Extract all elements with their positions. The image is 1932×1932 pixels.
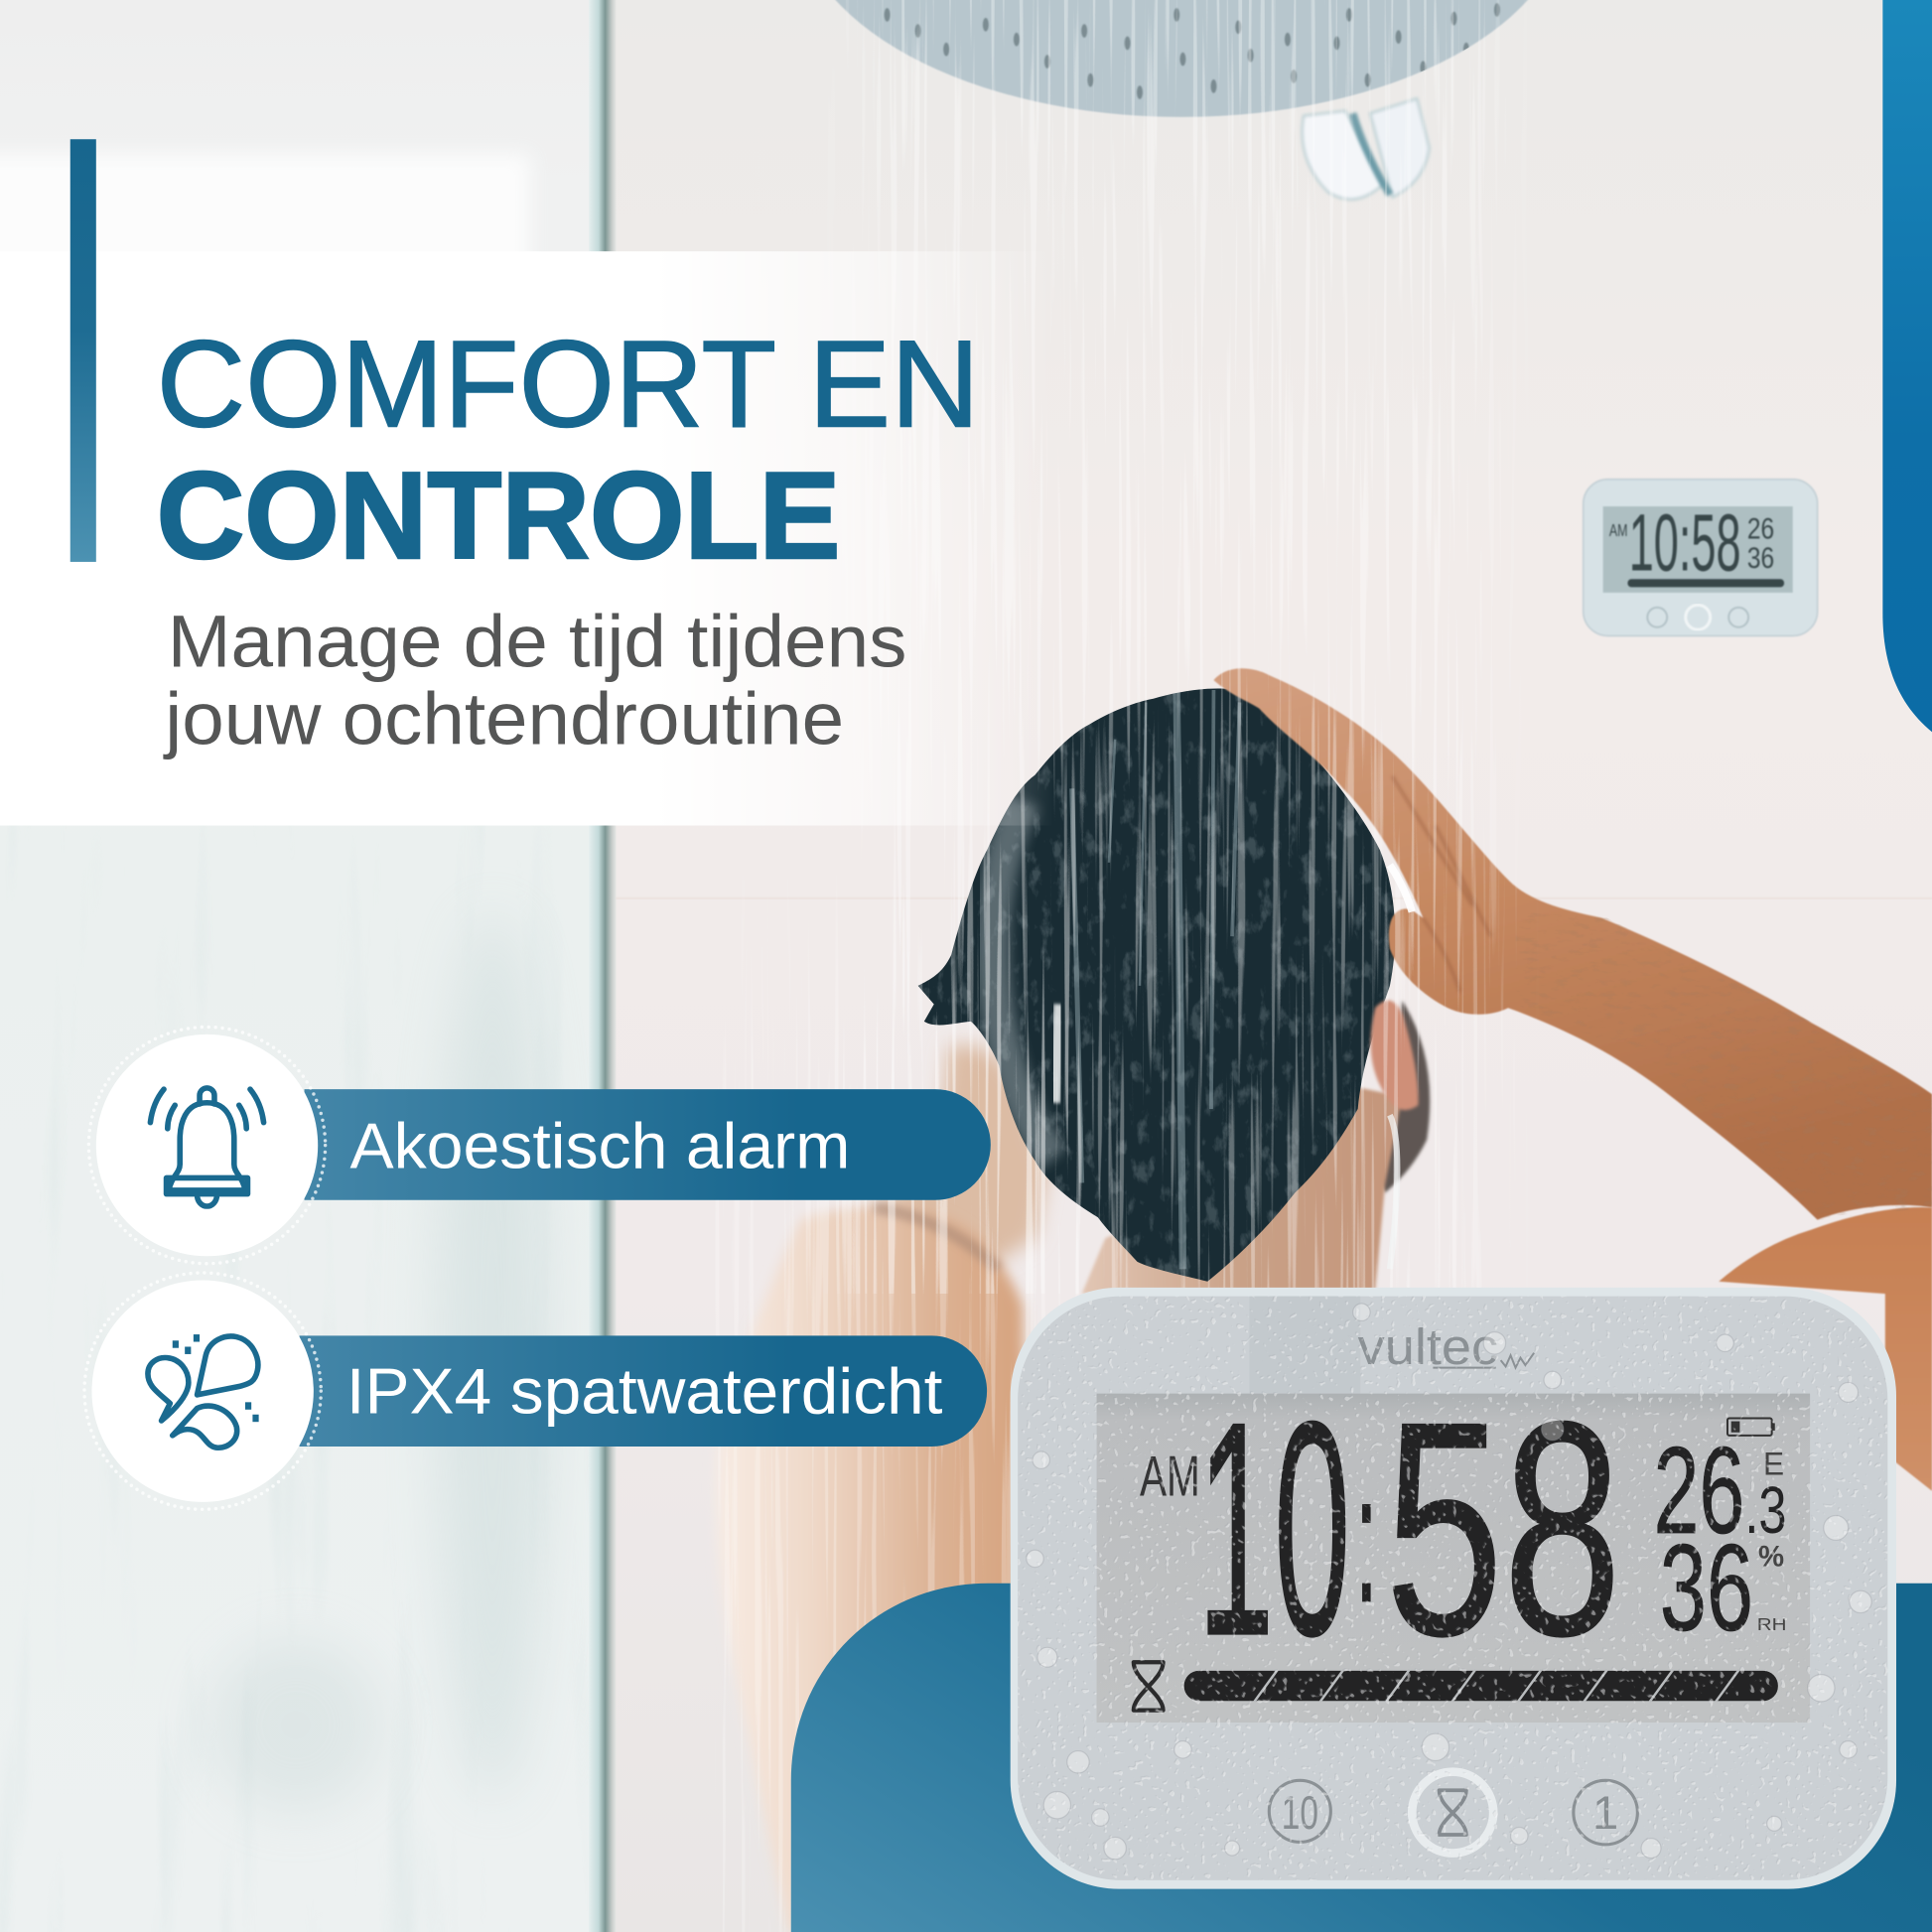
falling water streaks	[715, 0, 1540, 1932]
small clock on the wall	[1584, 480, 1818, 635]
lcd readout: :	[1354, 1435, 1379, 1641]
title	[157, 316, 980, 585]
white title panel	[0, 251, 1053, 826]
small clock readout: 26	[1747, 512, 1774, 545]
logo: vultec	[1358, 1318, 1498, 1375]
button 1	[1574, 1780, 1637, 1845]
button 10: 10	[1282, 1786, 1318, 1839]
clock casing	[1011, 1288, 1896, 1889]
subtitle	[163, 600, 906, 760]
subtitle: jouw ochtendroutine	[163, 678, 844, 760]
water droplets on clock	[1018, 1297, 1887, 1880]
humidity: 36	[1660, 1520, 1753, 1657]
lcd screen	[1097, 1394, 1810, 1723]
left arm behind the head	[863, 1044, 1047, 1269]
blue rounded panel bottom right	[791, 1584, 1932, 1932]
lower right arm	[1719, 1207, 1932, 1491]
lcd readout: 10	[1197, 1358, 1350, 1699]
pill label: IPX4 spatwaterdicht	[346, 1356, 942, 1428]
white circle	[96, 1035, 318, 1256]
lcd readout: 58	[1385, 1358, 1621, 1699]
button 10	[1269, 1780, 1330, 1842]
small clock readout: 36	[1747, 542, 1774, 575]
lcd readout: RH	[1757, 1614, 1787, 1634]
person showering	[716, 668, 1932, 1932]
buttons	[1269, 1772, 1637, 1854]
feature: acoustic alarm	[88, 1027, 991, 1264]
product: shower timer clock	[1011, 1288, 1896, 1889]
feature: splash proof	[84, 1273, 987, 1509]
pill	[305, 1089, 991, 1200]
lcd readout: E	[1763, 1447, 1784, 1482]
hair behind the ear	[1370, 1001, 1430, 1192]
small clock readout: 10:58	[1629, 498, 1741, 589]
title line 2: CONTROLE	[157, 448, 840, 585]
hair	[917, 689, 1394, 1282]
neck	[1082, 1084, 1402, 1294]
accent bar	[70, 139, 96, 562]
small clock readout: AM	[1609, 520, 1627, 540]
lcd readout: .3	[1744, 1473, 1787, 1548]
pill	[300, 1335, 987, 1447]
title line 1: COMFORT EN	[157, 316, 980, 453]
battery icon	[1727, 1418, 1775, 1436]
small clock readout	[1609, 498, 1784, 589]
shower head	[796, 0, 1568, 200]
lcd readout	[1140, 1358, 1787, 1699]
blue corner top right	[1882, 0, 1932, 732]
pill label: Akoestisch alarm	[349, 1111, 850, 1182]
button hourglass	[1412, 1772, 1493, 1854]
icon: bell	[150, 1088, 264, 1206]
button 1: 1	[1592, 1786, 1618, 1839]
back and shoulders	[716, 1206, 1029, 1932]
white circle	[91, 1280, 314, 1502]
countdown bar	[1184, 1670, 1778, 1702]
right hand and arm	[1213, 668, 1932, 1220]
subtitle: Manage de tijd tijdens	[168, 600, 906, 682]
am label: AM	[1140, 1446, 1200, 1509]
lcd readout: %	[1758, 1540, 1784, 1573]
water on neck	[1390, 1115, 1397, 1269]
temperature: 26	[1654, 1423, 1744, 1560]
hourglass icon	[1134, 1662, 1164, 1711]
small clock buttons	[1647, 605, 1748, 629]
ear	[1371, 1001, 1419, 1110]
icon: water drops	[148, 1334, 259, 1448]
upper arm shadow	[875, 1207, 998, 1269]
